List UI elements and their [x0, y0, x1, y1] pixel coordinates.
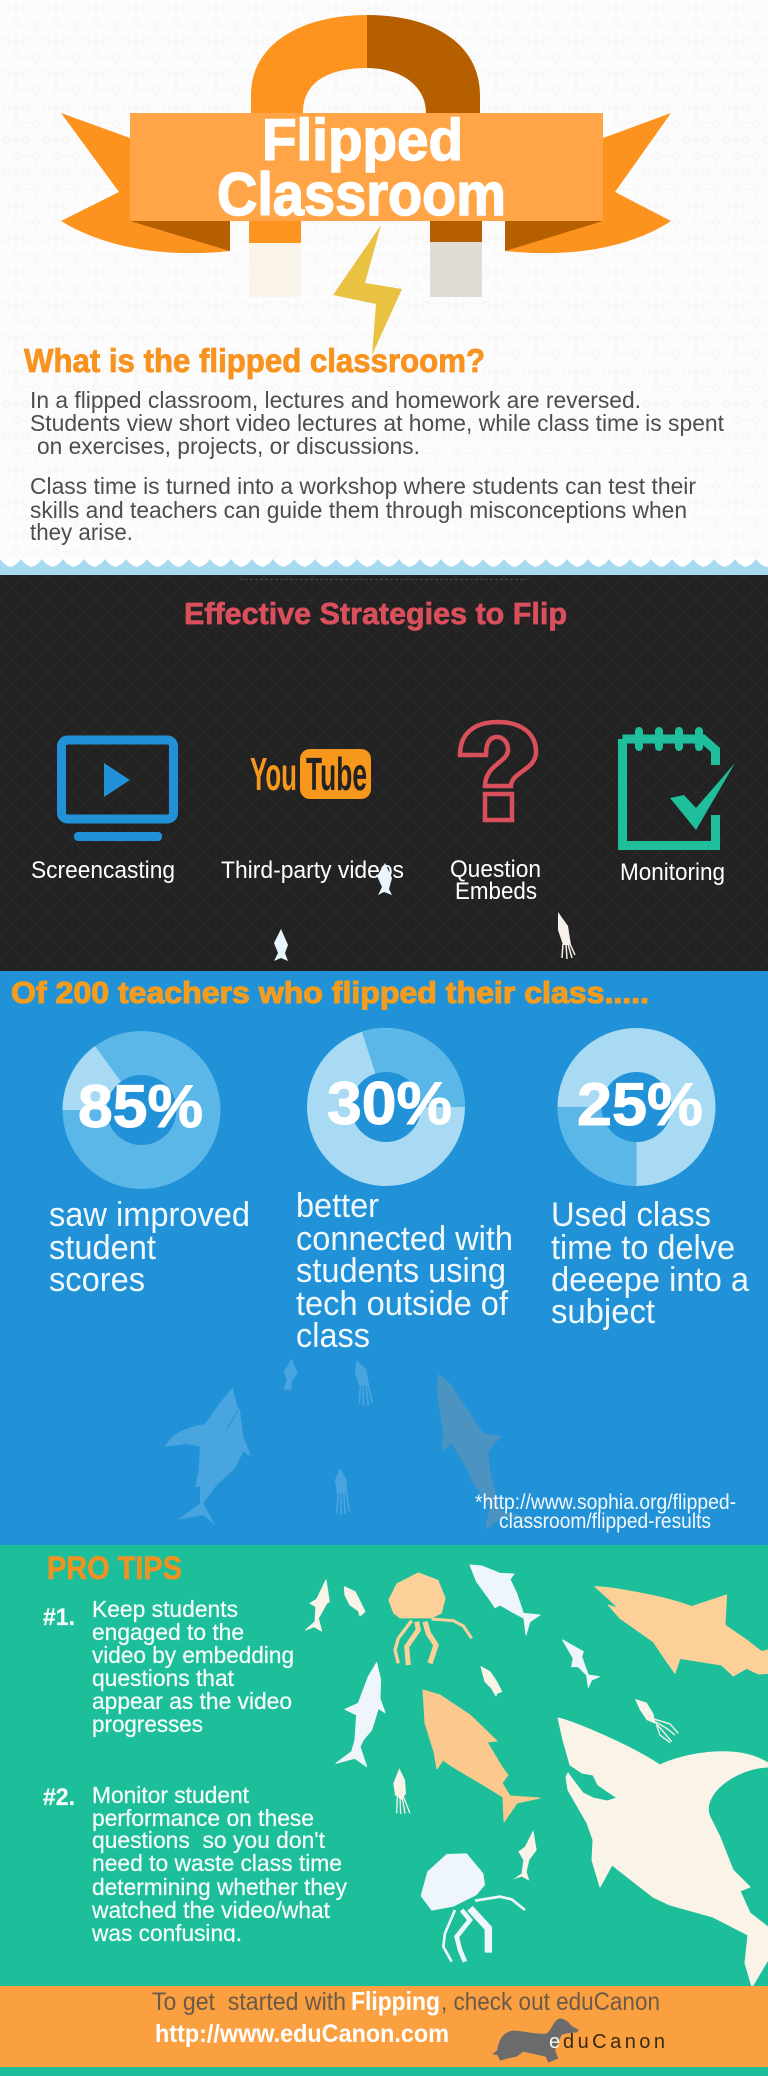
text: better connected: tech outside of — [296, 1285, 509, 1323]
logo: educanon dog: duCanon — [563, 2031, 665, 2053]
text: source citation: classroom/flipped-results — [499, 1510, 711, 1533]
text block: definition: on exercises, projects, or discussions. — [37, 433, 420, 459]
banner — [130, 113, 603, 221]
chart: 85 percent donut — [62, 1031, 221, 1189]
text: better connected: connected with — [296, 1220, 513, 1258]
tip 1: engaged to the — [92, 1619, 244, 1645]
tip 1: appear as the video — [92, 1688, 292, 1714]
ribbon tails — [61, 113, 671, 253]
title — [217, 108, 506, 228]
text block: definition: skills and teachers can guide them through misconceptions when — [30, 497, 687, 523]
text block: definition: Students view short video lectures at home, while class time is spent — [30, 410, 724, 436]
label: question embeds: Question — [450, 856, 541, 883]
tip 2: determining whether they — [92, 1874, 347, 1900]
heading: strategies: Effective Strategies to Flip — [184, 596, 567, 631]
decoration: faded sea creatures — [165, 1358, 539, 1530]
label: screencasting: Screencasting — [31, 857, 175, 884]
chart: 85 percent donut: 85% — [78, 1073, 203, 1140]
text: better connected — [296, 1187, 513, 1355]
icon: small fish lower — [274, 929, 288, 961]
text: get started — [152, 1986, 660, 2016]
tip 2: watched the video/what — [91, 1897, 331, 1923]
icon: question mark — [460, 722, 536, 820]
icon: lightning bolt — [333, 225, 402, 355]
tip 1: progresses — [92, 1711, 203, 1737]
text: saw improved: scores — [49, 1261, 145, 1299]
tip 1: video by embedding — [92, 1642, 294, 1668]
icon: small squid — [558, 912, 575, 959]
title: Classroom — [217, 161, 506, 228]
text: source citation: *http://www.sophia.org/flipped- — [475, 1491, 736, 1514]
icon: screencasting monitor — [62, 740, 174, 841]
title: Flipped — [262, 108, 463, 173]
text: website link: http://www.eduCanon.com — [155, 2020, 449, 2048]
panel: effective strategies — [0, 575, 768, 971]
tip 1: Keep students — [92, 1596, 238, 1622]
logo: educanon dog — [492, 2018, 665, 2063]
text: better connected: students using — [296, 1252, 506, 1290]
chart: 30 percent donut — [307, 1028, 465, 1186]
text: better connected: class — [296, 1317, 370, 1355]
text block: definition: they arise. — [30, 519, 133, 545]
tip 2: was confusing. — [91, 1920, 242, 1946]
icon: small fish — [377, 863, 392, 895]
icon: youtube logo: Tube — [306, 748, 367, 800]
label: monitoring: Monitoring — [620, 859, 725, 886]
text: saw improved: student — [49, 1229, 157, 1267]
tip 2: Monitor student — [92, 1782, 250, 1808]
text: better connected: better — [296, 1187, 379, 1225]
panel: intro background — [0, 0, 768, 576]
illustration: big cream shark — [558, 1718, 768, 1987]
illustration: orange jellyfish — [388, 1572, 472, 1665]
tip 1 — [43, 1596, 294, 1737]
label: question embeds: Embeds — [455, 878, 537, 905]
magnet arch — [249, 15, 482, 297]
text block: definition: Class time is turned into a workshop where students can test their — [30, 473, 696, 499]
chart: 30 percent donut: 30% — [327, 1070, 452, 1137]
illustration: orange fish — [423, 1690, 540, 1822]
panel: survey results — [0, 971, 768, 1545]
chart: 25 percent donut — [558, 1028, 716, 1186]
panel: call to action footer — [0, 1986, 768, 2067]
label: third-party videos: Third-party videos — [221, 857, 404, 884]
tip 2: #2. — [43, 1784, 75, 1811]
text: get started: Flipping — [351, 1986, 440, 2016]
text: get started: , check out eduCanon — [441, 1988, 660, 2016]
tip 1: #1. — [43, 1604, 75, 1631]
tip 1: questions that — [92, 1665, 235, 1691]
tip 2: questions so you don't — [92, 1827, 326, 1853]
text: used class time: Used class — [551, 1196, 711, 1234]
illustration: lower creatures — [393, 1768, 537, 1962]
text: used class time — [551, 1196, 749, 1331]
text: used class time: subject — [551, 1293, 656, 1331]
heading: 200 teachers: Of 200 teachers who flipped their class..... — [11, 975, 649, 1010]
icon: monitoring notepad — [622, 731, 735, 846]
text: source citation — [475, 1491, 736, 1533]
illustration: small fish school — [306, 1565, 599, 1767]
label: question embeds — [450, 856, 541, 905]
logo: educanon dog: e — [549, 2031, 560, 2053]
text: saw improved: saw improved — [49, 1196, 250, 1234]
illustration: orange shark — [595, 1587, 768, 1676]
icon: magnet and title banner — [61, 15, 671, 355]
tip 2: performance on these — [92, 1805, 314, 1831]
tip 2: need to waste class time — [92, 1850, 342, 1876]
icon: youtube logo: You — [250, 748, 297, 800]
heading: pro tips: PRO TIPS — [47, 1550, 182, 1586]
illustration: squid upper — [635, 1699, 678, 1743]
icon: youtube logo — [250, 748, 371, 800]
panel: pro tips — [0, 1545, 768, 2076]
text: get started: To get started with — [152, 1988, 346, 2016]
tip 2 — [43, 1782, 347, 1946]
text block: definition: In a flipped classroom, lectures and homework are reversed. — [30, 387, 641, 413]
text: used class time: deeepe into a — [551, 1261, 749, 1299]
chart: 25 percent donut: 25% — [577, 1071, 703, 1138]
text block: definition — [30, 387, 724, 545]
text: saw improved — [49, 1196, 250, 1299]
text: used class time: time to delve — [551, 1229, 735, 1267]
heading: what is the flipped classroom: What is the flipped classroom? — [24, 342, 485, 379]
